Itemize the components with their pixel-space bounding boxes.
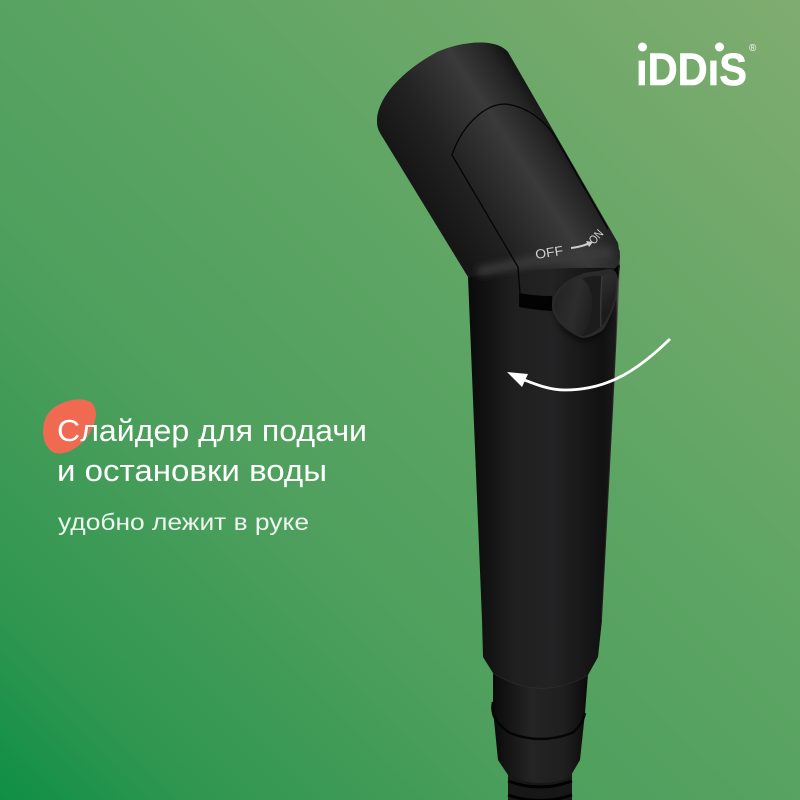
panel outline	[452, 104, 608, 293]
OFF to ON label: OFF	[534, 243, 564, 262]
knob shadow	[553, 290, 612, 342]
coral accent blob	[43, 399, 96, 454]
body right rim	[602, 265, 619, 620]
heading: Слайдер для подачи	[57, 413, 367, 448]
OFF to ON label: ON	[586, 226, 606, 247]
heading: и остановки воды	[57, 453, 327, 488]
heading	[57, 413, 367, 488]
angled head	[377, 43, 620, 277]
OFF to ON label	[534, 226, 606, 262]
handle body	[468, 250, 620, 688]
iddis logo: ®	[749, 43, 757, 54]
slot right	[612, 264, 620, 282]
subheading: удобно лежит в руке	[58, 509, 309, 535]
shoulder highlight	[478, 252, 612, 272]
hose	[508, 770, 572, 800]
slider knob	[552, 269, 618, 338]
lower collar	[492, 672, 588, 783]
iddis logo: ıDDıS	[636, 44, 747, 95]
arrow showing slider rotation	[507, 339, 670, 390]
product: black hand shower	[377, 43, 620, 800]
slot	[519, 293, 552, 311]
